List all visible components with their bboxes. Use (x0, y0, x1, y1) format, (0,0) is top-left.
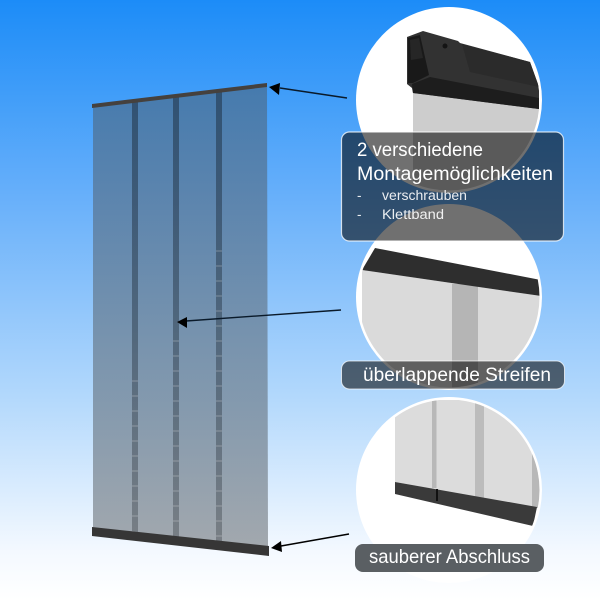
bottom rail (92, 527, 269, 556)
arrow: bottom rail (271, 534, 349, 552)
detail circle: mounting profile (356, 7, 542, 200)
callout list: - (357, 207, 362, 222)
arrow: strips (177, 310, 341, 328)
callout list: - (357, 188, 362, 203)
overlapping strips (132, 89, 222, 541)
detail circle: bottom edge (356, 397, 542, 544)
callout list (357, 188, 467, 222)
label: overlapping strips: überlappende Streifen (363, 364, 551, 386)
label: overlapping strips (342, 361, 564, 389)
callout list: verschrauben (382, 188, 467, 203)
mesh panel (93, 85, 268, 547)
curtain illustration (92, 83, 269, 556)
callout: mounting options (342, 132, 564, 241)
callout list: Klettband (382, 207, 444, 222)
callout heading: 2 verschiedene (357, 140, 483, 161)
detail circle: overlapping strips (356, 204, 542, 390)
callout heading (357, 140, 553, 185)
label: clean finish: sauberer Abschluss (369, 546, 530, 568)
arrow: top rail (269, 83, 347, 98)
strip weave highlights (135, 250, 219, 540)
top rail (92, 83, 267, 108)
callout heading: Montagemöglichkeiten (357, 164, 553, 185)
